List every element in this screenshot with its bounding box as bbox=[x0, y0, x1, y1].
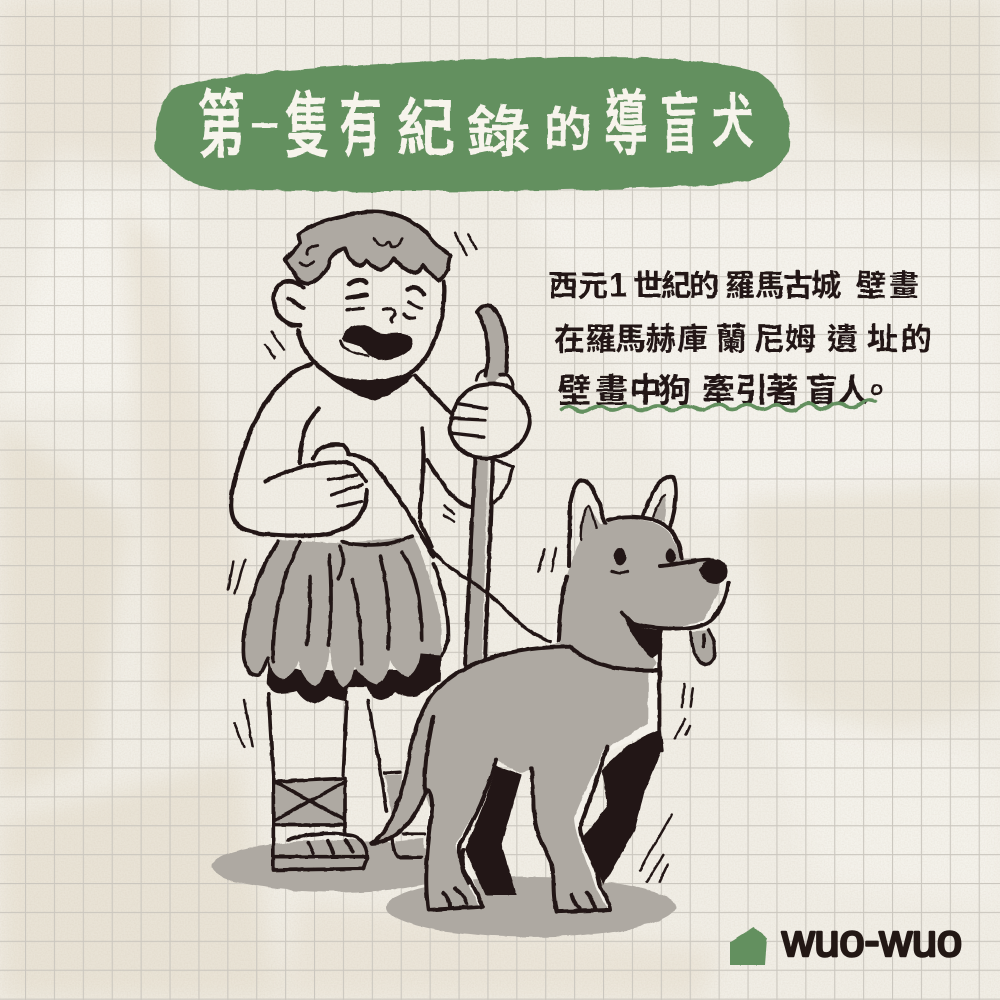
line 2: 蘭 bbox=[716, 322, 747, 357]
far leg and foot bbox=[368, 700, 425, 857]
line 2: 尼 bbox=[754, 322, 785, 357]
skirt and legs bbox=[228, 537, 448, 870]
near leg and sandal bbox=[268, 693, 367, 870]
torso and arm bbox=[231, 364, 451, 536]
line 1: 古 bbox=[783, 270, 813, 303]
title text: 隻 bbox=[285, 86, 330, 167]
line 3: 引 bbox=[735, 372, 768, 409]
line 1: 世 bbox=[633, 270, 663, 303]
line 1: 的 bbox=[689, 270, 719, 303]
skirt pleats bbox=[243, 537, 448, 675]
title text: 錄 bbox=[467, 103, 530, 163]
line 2: 遺 bbox=[827, 322, 858, 357]
wavy green underline bbox=[561, 400, 875, 412]
motion marks bbox=[538, 548, 693, 883]
ears bbox=[569, 476, 676, 566]
line 3: 狗 bbox=[658, 372, 691, 409]
title text: 紀 bbox=[397, 93, 455, 163]
title text: 第 bbox=[198, 85, 244, 168]
walking stick bbox=[465, 305, 507, 665]
icon: green house bbox=[730, 927, 767, 965]
line 1: 畫 bbox=[889, 270, 919, 303]
line 3: 畫 bbox=[595, 372, 628, 409]
chest hand bbox=[265, 408, 472, 557]
line 2: 姆 bbox=[785, 322, 816, 357]
logo bbox=[730, 915, 962, 966]
far legs bbox=[465, 728, 662, 895]
line 1: 馬 bbox=[755, 270, 785, 303]
title text: 盲 bbox=[660, 89, 699, 162]
motion marks bbox=[265, 233, 476, 522]
line 3: 人 bbox=[836, 372, 869, 409]
skirt fill bbox=[243, 537, 442, 687]
line 1: 羅 bbox=[725, 270, 755, 303]
line 2: 的 bbox=[901, 322, 932, 357]
line 2: 在 bbox=[554, 322, 585, 357]
title text bbox=[198, 84, 753, 168]
under skirt bbox=[267, 642, 442, 704]
motion marks bbox=[228, 559, 253, 747]
line 3: 著 bbox=[766, 372, 799, 409]
guide dog bbox=[372, 476, 728, 912]
gripping hand bbox=[450, 370, 530, 503]
open mouth bbox=[341, 325, 413, 360]
leash bbox=[390, 485, 562, 645]
hair bbox=[285, 211, 451, 283]
face and ear bbox=[273, 281, 444, 383]
line 1: 壁 bbox=[856, 270, 886, 303]
line 3: 壁 bbox=[558, 372, 591, 409]
eyes and nose bbox=[347, 280, 424, 298]
blind man bbox=[228, 211, 728, 912]
ground shadows bbox=[212, 840, 675, 937]
line 3: 盲 bbox=[805, 372, 838, 409]
brand name: wuo-wuo bbox=[781, 915, 962, 966]
line 3: 牽 bbox=[702, 372, 735, 409]
line 2: 庫 bbox=[677, 322, 708, 357]
line 1: 城 bbox=[811, 270, 841, 303]
line 3: 中 bbox=[629, 372, 662, 409]
banner shape bbox=[156, 57, 790, 191]
title text: 有 bbox=[339, 89, 381, 166]
title text: 導 bbox=[604, 84, 647, 165]
line 1: 紀 bbox=[661, 270, 691, 303]
line 1: 西 bbox=[548, 270, 578, 303]
line 1: 1 bbox=[609, 267, 627, 303]
white body highlight bbox=[425, 523, 723, 912]
line 1: 元 bbox=[578, 270, 608, 303]
body fill bbox=[372, 519, 723, 912]
line 2: 址 bbox=[867, 322, 898, 357]
title text: 的 bbox=[544, 105, 592, 157]
line 2: 赫 bbox=[645, 322, 676, 357]
description text bbox=[548, 267, 932, 412]
line 2: 馬 bbox=[615, 322, 646, 357]
face bbox=[608, 517, 728, 659]
dog shadow bbox=[387, 877, 675, 937]
upper body bbox=[231, 211, 476, 557]
tail bbox=[372, 687, 440, 843]
man shadow bbox=[212, 840, 458, 892]
body outlines bbox=[425, 577, 662, 912]
title text: 犬 bbox=[712, 89, 753, 155]
line 2: 羅 bbox=[585, 322, 616, 357]
tongue bbox=[691, 630, 715, 665]
collar shadow bbox=[317, 366, 415, 401]
title banner bbox=[156, 57, 790, 191]
line 3: 。 bbox=[860, 372, 893, 409]
title text: 一 bbox=[251, 106, 278, 150]
